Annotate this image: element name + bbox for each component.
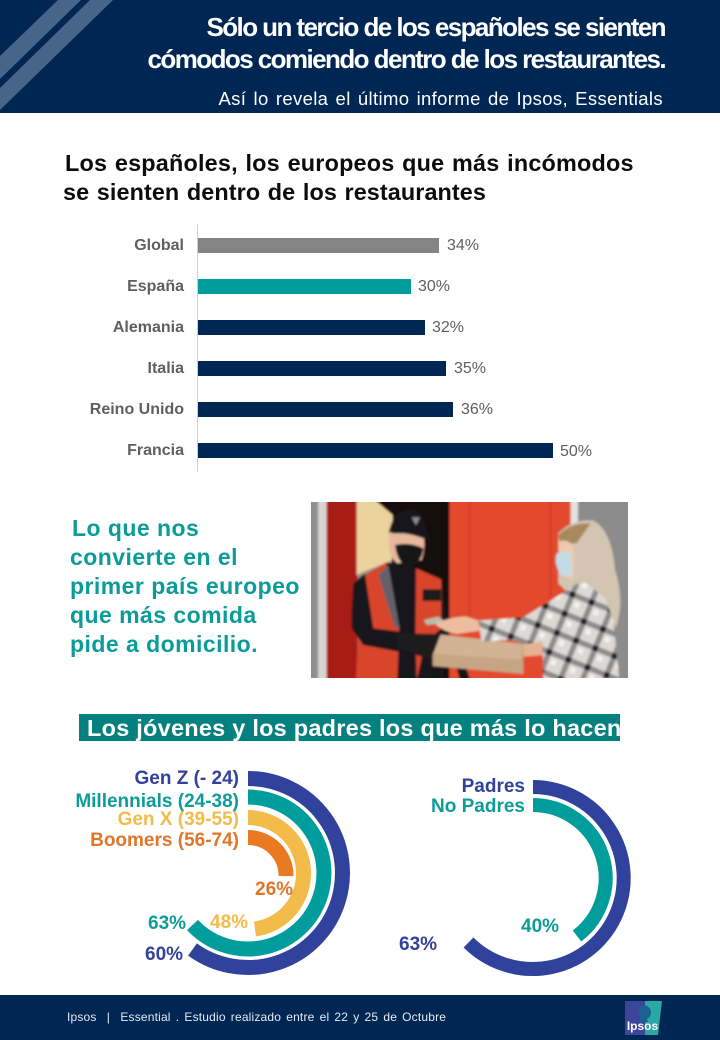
section heading: europeans [63,150,634,204]
bar row: Francia [127,442,592,460]
callout text: delivery: primer país europeo [70,573,300,599]
banner text: Los jóvenes y los padres los que más lo hacen [87,715,622,741]
bar row: Global: 34% [447,237,479,254]
bar row: Alemania: 32% [432,319,464,336]
legend: parents: No Padres [431,796,525,817]
callout text: delivery: Lo que nos [72,515,199,541]
radial chart: parents: 63% [399,934,437,955]
straps [427,668,442,680]
section heading: europeans: se sienten dentro de los restaurantes [63,178,486,204]
pizza box [433,635,523,674]
bar row: Francia: 50% [560,443,592,460]
radial chart: parents [399,776,631,976]
section heading banner: young people and parents [79,714,620,741]
value labels: generations: 60% [145,944,183,965]
callout text: delivery: convierte en el [70,544,238,570]
courier torso [386,563,447,680]
decorative diagonal stripes [0,0,113,110]
title: Sólo un tercio de los españoles se sienten [206,12,665,42]
face mask [556,551,573,576]
legend: parents: Padres [462,776,525,797]
bar row: Reino Unido [90,401,493,418]
bar row: Italia [148,360,486,377]
woman face [558,541,575,580]
legend: generations: Gen Z (- 24) [134,768,239,789]
radial chart: generations [75,768,350,975]
courier face [389,533,424,563]
title [148,12,665,74]
bar row: Alemania [113,319,464,336]
bar row: Reino Unido: Reino Unido [90,401,184,418]
arc: Gen Z 60% [192,778,342,967]
bar row: Italia: 35% [454,360,486,377]
bar chart: discomfort by country [90,224,592,472]
callout text: delivery: pide a domicilio. [70,631,258,657]
bar row: Alemania: Alemania [113,319,184,336]
Ipsos logo: Ipsos [627,1019,658,1033]
bar row: España [127,278,450,295]
callout text: delivery: que más comida [70,602,257,628]
footer bar [0,995,720,1040]
arc: No Padres 40% [533,805,606,936]
title: cómodos comiendo dentro de los restaurantes. [148,44,665,74]
bar row: Italia: Italia [148,360,184,377]
value labels: generations [145,879,293,965]
source note: Ipsos | Essential . Estudio realizado entre el 22 y 25 de Octubre [67,1010,446,1024]
bar row: Global: Global [134,237,184,254]
arc: Millennials 63% [192,797,324,949]
gloved hand [397,633,438,660]
legend: parents [431,776,525,817]
bar row: Reino Unido: 36% [461,401,493,418]
arc: Boomers 26% [248,838,286,876]
woman hand [435,617,480,634]
value labels: generations: 26% [255,879,293,900]
legend: generations: Gen X (39-55) [118,809,239,830]
subtitle: Así lo revela el último informe de Ipsos, Essentials [218,88,663,109]
cash [424,617,446,625]
arc: Padres 63% [468,787,624,969]
plaid shirt [478,582,619,680]
value labels: generations: 48% [210,912,248,933]
value labels: generations: 63% [148,913,186,934]
legend: generations: Millennials (24-38) [75,791,239,812]
woman hair [558,520,620,627]
header banner [0,0,720,113]
photo: food delivery at the door [311,502,628,678]
callout text: delivery [70,515,300,657]
bar row: España: 30% [418,278,450,295]
bar row: Francia: Francia [127,442,184,459]
legend: generations: Boomers (56-74) [90,830,239,851]
courier arm [352,574,400,652]
section heading: europeans: Los españoles, los europeos que más incómodos [65,150,634,176]
legend: generations [75,768,239,851]
arc: Gen X 48% [248,818,304,929]
bar row: España: España [127,278,184,295]
value labels: parents: 40% [521,916,559,937]
bar row: Global [134,237,479,254]
Ipsos logo [625,1001,662,1035]
